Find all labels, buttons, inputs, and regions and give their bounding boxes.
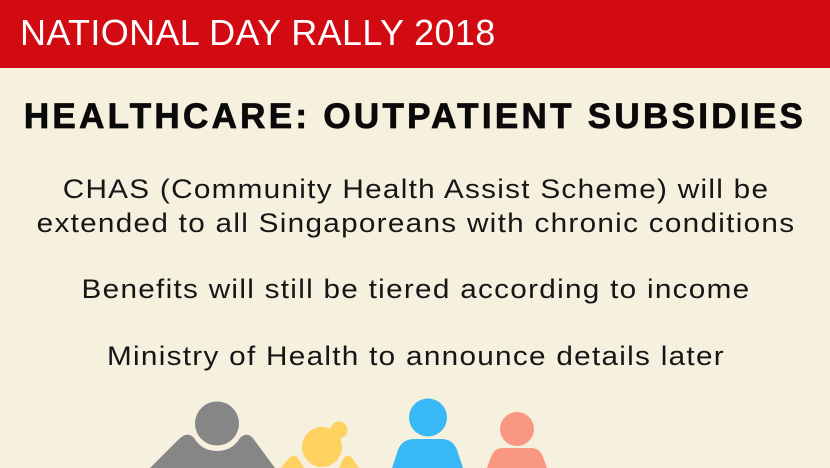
header title: NATIONAL DAY RALLY 2018 [20, 12, 496, 53]
icon: blue adult [392, 398, 463, 468]
text: tiered benefits: Benefits will still be tiered according to income [82, 274, 750, 304]
main heading: HEALTHCARE: OUTPATIENT SUBSIDIES [24, 97, 806, 136]
text: CHAS extension [37, 174, 795, 238]
header banner [0, 0, 830, 68]
text: CHAS extension: CHAS (Community Health Assist Scheme) will be [63, 174, 769, 204]
icon: salmon child [487, 412, 547, 468]
text: CHAS extension: extended to all Singaporeans with chronic conditions [37, 208, 795, 238]
icon: yellow child [281, 422, 359, 468]
icon: grey adult [150, 402, 275, 468]
text: ministry details: Ministry of Health to announce details later [107, 341, 725, 371]
